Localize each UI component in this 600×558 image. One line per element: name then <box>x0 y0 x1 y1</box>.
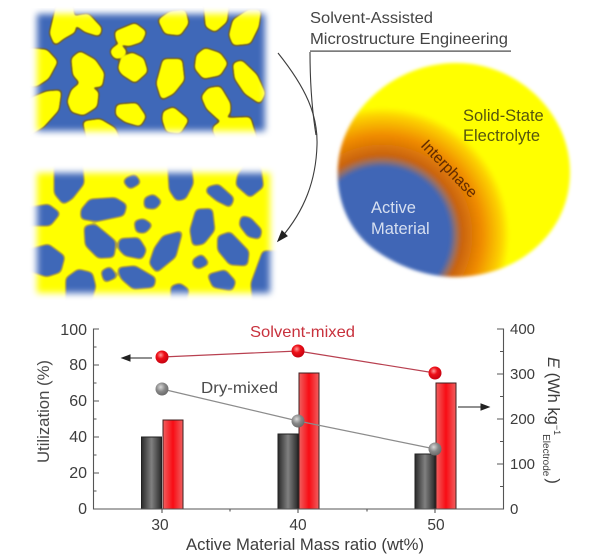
bars: dry-mixed energy <box>142 434 435 509</box>
label: interphase: Interphase <box>417 137 480 201</box>
left axis tick labels: 100 <box>60 322 87 339</box>
label: solid-state electrolyte <box>463 107 544 145</box>
right axis title: ) <box>544 478 562 484</box>
right axis tick labels: 400 <box>510 321 535 338</box>
label: active material <box>371 199 430 238</box>
heading: solvent-assisted microstructure engineering: Solvent-Assisted <box>310 10 433 27</box>
line: dry-mixed utilization <box>156 382 442 456</box>
axes with tick marks <box>94 329 504 513</box>
label: solid-state electrolyte: Solid-State <box>463 107 544 125</box>
arrow: curved process arrow between microstructures <box>278 52 317 241</box>
right axis title: −1 <box>552 425 562 435</box>
panel: yellow particles in blue matrix (dry-mixed microstructure) <box>31 8 270 137</box>
right axis title: Electrode <box>540 434 551 477</box>
right axis title: E (Wh kg <box>544 357 562 425</box>
arrow: points to left axis <box>122 355 152 361</box>
heading: solvent-assisted microstructure engineering: Microstructure Engineering <box>310 31 508 48</box>
line: solvent-mixed utilization <box>156 344 442 380</box>
right axis tick labels: 200 <box>510 411 535 428</box>
panel: zoomed particle interface circle <box>338 63 570 277</box>
left axis tick labels: 40 <box>69 429 87 446</box>
left axis tick labels: 20 <box>69 465 87 482</box>
bar chart: utilization and energy vs active material mass ratio <box>35 321 562 554</box>
right axis tick labels: 100 <box>510 456 535 473</box>
label: active material: Active <box>371 199 416 217</box>
heading: solvent-assisted microstructure engineering <box>310 10 511 52</box>
label: active material: Material <box>371 220 430 238</box>
left axis tick labels <box>60 322 87 518</box>
right axis tick labels: 0 <box>510 501 518 518</box>
x axis tick labels <box>151 517 445 534</box>
x axis tick labels: 40 <box>289 517 307 534</box>
bars: solvent-mixed energy <box>163 373 456 509</box>
x axis tick labels: 50 <box>427 517 445 534</box>
left axis tick labels: 80 <box>69 357 87 374</box>
arrow: points to right axis <box>458 404 489 410</box>
right axis tick labels: 300 <box>510 366 535 383</box>
label: dry-mixed: Dry-mixed <box>201 380 278 397</box>
label: solvent-mixed: Solvent-mixed <box>250 324 355 341</box>
label: solid-state electrolyte: Electrolyte <box>463 127 540 145</box>
left axis title: Utilization (%) <box>35 360 53 463</box>
left axis tick labels: 60 <box>69 393 87 410</box>
x axis tick labels: 30 <box>151 517 169 534</box>
left axis tick labels: 0 <box>78 501 87 518</box>
panel: blue particles in yellow matrix (solvent-mixed microstructure) <box>27 162 280 303</box>
x axis title: Active Material Mass ratio (wt%) <box>186 536 424 554</box>
right axis tick labels <box>510 321 535 518</box>
